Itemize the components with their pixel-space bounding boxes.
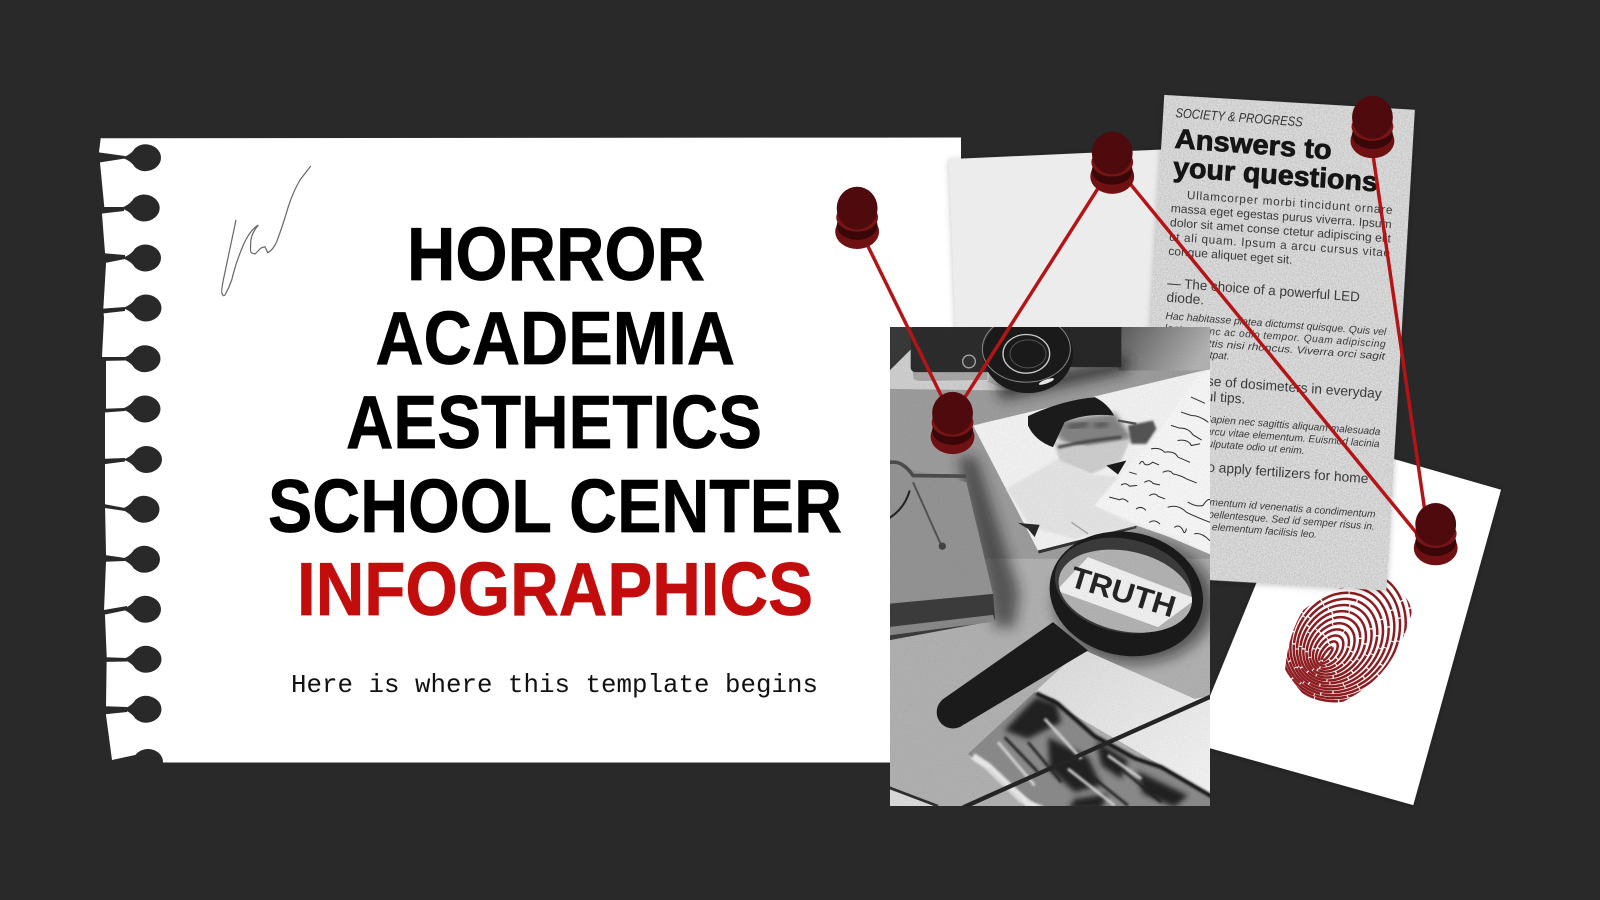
magnifying glass xyxy=(936,532,1203,728)
article text: lectus nunc ac odio tempor. Quam adipiscing xyxy=(1164,323,1386,350)
landscape print xyxy=(888,692,1213,810)
article text: Hac habitasse platea dictumst quisque. Quis vel xyxy=(1165,311,1387,338)
article text: useful tips. xyxy=(1179,387,1246,407)
article text: congue aliquet eget sit. xyxy=(1168,245,1293,267)
article text: The use of dosimeters in everyday xyxy=(1171,371,1382,401)
title: INFOGRAPHICS xyxy=(297,547,813,631)
subtitle: Here is where this template begins xyxy=(291,671,818,700)
article text: diode. xyxy=(1166,290,1205,307)
article text xyxy=(1152,188,1395,545)
icon: push pin 1 xyxy=(835,187,879,249)
title xyxy=(268,212,842,631)
panel: blank gray sheet xyxy=(949,149,1173,337)
article text: ut ali quam. Ipsum a arcu cursus vitae xyxy=(1169,231,1390,260)
article text: How to apply fertilizers for home xyxy=(1172,457,1369,486)
photo: desk with magnifying glass xyxy=(890,327,1210,806)
panel: fingerprint card xyxy=(1210,459,1501,806)
title: AESTHETICS xyxy=(346,380,762,464)
article text: — The choice of a powerful LED xyxy=(1167,275,1360,305)
sheet under magnifier xyxy=(1035,648,1213,795)
article text: Ullamcorper morbi tincidunt ornare xyxy=(1187,189,1393,217)
headline: Answers to xyxy=(1174,123,1333,165)
icon: fingerprint xyxy=(1285,579,1412,702)
title: HORROR xyxy=(407,212,705,296)
collage base: paper, sheets and clipping xyxy=(99,94,1501,806)
headline xyxy=(1171,105,1382,197)
title: SCHOOL CENTER xyxy=(268,464,842,548)
camera xyxy=(911,314,1121,393)
article text: arcu vitae elementum. Euismod lacinia xyxy=(1205,427,1380,450)
title: ACADEMIA xyxy=(376,296,735,380)
icon: push pin 5 xyxy=(1414,503,1458,565)
article text: ut elementum facilisis leo. xyxy=(1200,521,1317,541)
binder holes xyxy=(96,144,163,775)
icon: push pin 4 xyxy=(931,392,974,454)
article text: volutpat. xyxy=(1191,349,1230,363)
article text: nec sagittis nisi rhoncus. Viverra orci sagit xyxy=(1164,335,1387,363)
panel: newspaper clipping xyxy=(1136,95,1415,591)
label: TRUTH: TRUTH xyxy=(1066,561,1179,624)
panel: torn notebook paper xyxy=(96,138,961,775)
handwritten letter xyxy=(1095,368,1213,555)
headline: SOCIETY & PROGRESS xyxy=(1175,105,1303,130)
arrows: red string connecting pins xyxy=(865,151,1425,538)
pins xyxy=(835,96,1458,565)
book with glasses xyxy=(888,462,995,640)
article text: Sapien nec sagittis aliquam malesuada xyxy=(1204,414,1381,438)
signature scribble xyxy=(222,166,311,296)
icon: push pin 2 xyxy=(1090,132,1134,194)
article text: massa eget egestas purus viverra. Ipsum xyxy=(1170,202,1392,231)
portrait print xyxy=(973,368,1213,553)
article text: pellentesque. Sed id semper risus in. xyxy=(1207,509,1375,533)
article text: Fermentum id venenatis a condimentum xyxy=(1194,496,1376,521)
headline: your questions xyxy=(1172,151,1379,197)
article text: dolor sit amet conse ctetur adipiscing elit xyxy=(1170,216,1392,246)
icon: push pin 3 xyxy=(1350,96,1394,158)
article text: quis sed vulputate odio ut enim. xyxy=(1161,436,1305,457)
